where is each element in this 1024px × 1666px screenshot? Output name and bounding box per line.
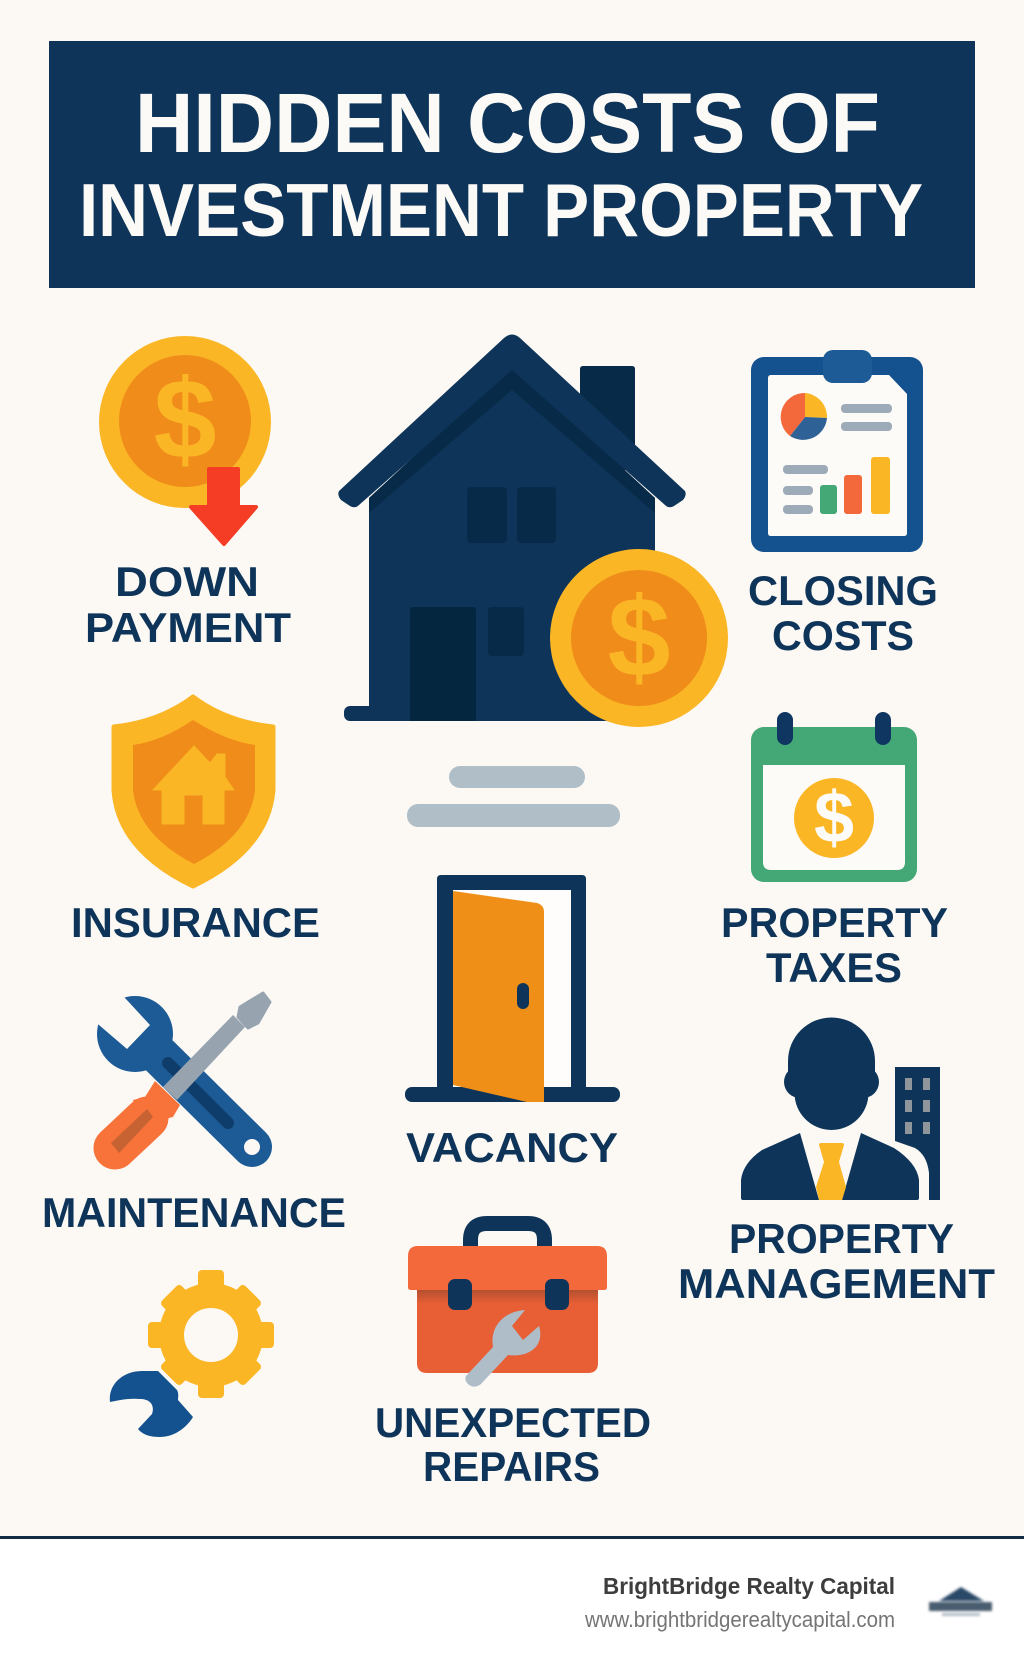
footer company name: BrightBridge Realty Capital bbox=[603, 1573, 895, 1599]
icon: coin with down arrow: $ bbox=[154, 356, 216, 482]
label: property taxes bbox=[721, 899, 948, 991]
label: unexpected repairs bbox=[375, 1399, 651, 1490]
decorative pill bars bbox=[407, 766, 620, 827]
label: closing costs bbox=[748, 567, 938, 659]
label: closing costs: CLOSING bbox=[748, 567, 938, 614]
label: down payment: PAYMENT bbox=[85, 604, 291, 651]
icon: company logo bbox=[929, 1587, 992, 1616]
icon: property taxes calendar bbox=[751, 712, 917, 882]
icon: unexpected repairs toolbox bbox=[408, 1224, 607, 1387]
icon: insurance shield bbox=[114, 697, 273, 886]
icon: vacancy open door bbox=[405, 875, 620, 1102]
panel: central house with coin bbox=[338, 334, 728, 727]
label: closing costs: COSTS bbox=[772, 612, 914, 659]
icon: large coin: $ bbox=[608, 574, 670, 700]
icon: property manager with building bbox=[741, 1018, 940, 1200]
icon: gear and wrench bbox=[110, 1270, 274, 1437]
label: property management: PROPERTY bbox=[729, 1215, 954, 1262]
label: property management: MANAGEMENT bbox=[678, 1260, 995, 1307]
label: down payment: DOWN bbox=[115, 558, 259, 605]
panel: down payment bbox=[85, 336, 291, 651]
label: unexpected repairs: REPAIRS bbox=[423, 1443, 600, 1490]
label: vacancy: VACANCY bbox=[406, 1124, 618, 1171]
label: insurance: INSURANCE bbox=[71, 899, 320, 946]
label: property taxes: PROPERTY bbox=[721, 899, 948, 946]
footer website: www.brightbridgerealtycapital.com bbox=[584, 1607, 895, 1632]
footer bbox=[0, 1536, 1024, 1666]
label: property taxes: TAXES bbox=[766, 944, 902, 991]
title banner: HIDDEN COSTS OF bbox=[135, 76, 880, 170]
title banner: INVESTMENT PROPERTY bbox=[79, 168, 923, 252]
title banner bbox=[49, 41, 975, 288]
icon: property taxes calendar: $ bbox=[814, 778, 854, 858]
label: unexpected repairs: UNEXPECTED bbox=[375, 1399, 651, 1446]
icon: large coin bbox=[550, 549, 728, 727]
label: maintenance: MAINTENANCE bbox=[42, 1189, 346, 1236]
label: down payment bbox=[85, 558, 291, 651]
icon: house bbox=[338, 334, 686, 721]
label: property management bbox=[678, 1215, 995, 1307]
icon: maintenance wrench and screwdriver bbox=[70, 970, 270, 1155]
icon: closing costs clipboard bbox=[751, 350, 923, 552]
icon: coin with down arrow bbox=[99, 336, 271, 544]
